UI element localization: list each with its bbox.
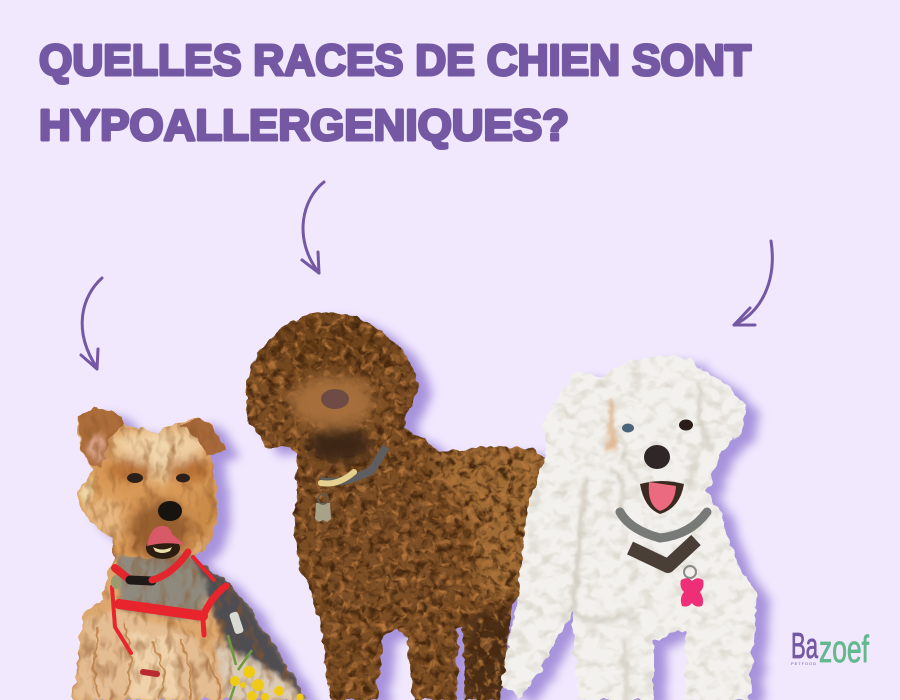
bichon tag ring — [684, 566, 696, 578]
yorkie collar tag — [111, 575, 121, 589]
bichon eyes — [622, 420, 693, 432]
bichon nose — [644, 445, 670, 469]
yorkie tongue — [147, 526, 185, 546]
bichon collar band — [620, 512, 707, 538]
bichon leather collar — [630, 540, 696, 566]
yorkie harness — [112, 557, 226, 674]
yorkie chest hair strands — [94, 625, 220, 698]
bichon shading — [572, 385, 712, 700]
yorkie body — [70, 405, 310, 700]
yorkie teeth — [153, 547, 172, 553]
labradoodle tag — [315, 503, 331, 522]
logo: Bazoef — [791, 625, 869, 671]
dog: brown curly labradoodle — [240, 305, 550, 700]
yorkie collar — [115, 552, 188, 581]
title — [39, 36, 751, 150]
bichon pink tag — [680, 578, 704, 607]
labradoodle muzzle — [290, 376, 374, 463]
yorkie leash clip — [229, 611, 244, 635]
flowers — [228, 635, 304, 700]
yorkie eyes — [127, 473, 190, 483]
title line 1: QUELLES RACES DE CHIEN SONT — [39, 36, 751, 85]
bichon coat — [495, 350, 760, 700]
yorkie muzzle shadow — [130, 500, 190, 560]
arrow to labradoodle — [302, 182, 324, 273]
labradoodle collar — [320, 447, 386, 482]
logo Ba: Ba — [791, 625, 819, 666]
bichon tongue — [649, 482, 676, 511]
labradoodle tag ring — [318, 494, 328, 504]
yorkie nose — [158, 501, 182, 521]
labradoodle nose — [321, 389, 349, 409]
yorkie face — [75, 409, 226, 560]
arrow to yorkshire — [81, 278, 102, 369]
labradoodle coat — [240, 305, 550, 700]
yorkie mouth — [146, 537, 180, 559]
logo tagline: PETFOOD — [791, 661, 816, 666]
title line 2: HYPOALLERGENIQUES? — [39, 101, 569, 150]
dog: yorkshire terrier — [70, 405, 310, 700]
bichon ear tan — [606, 400, 616, 452]
dog: white bichon mix — [495, 350, 760, 700]
logo zoef: zoef — [819, 629, 869, 671]
bichon mouth — [640, 481, 684, 514]
arrow to bichon — [734, 241, 772, 325]
labradoodle collar clasp — [321, 472, 354, 484]
